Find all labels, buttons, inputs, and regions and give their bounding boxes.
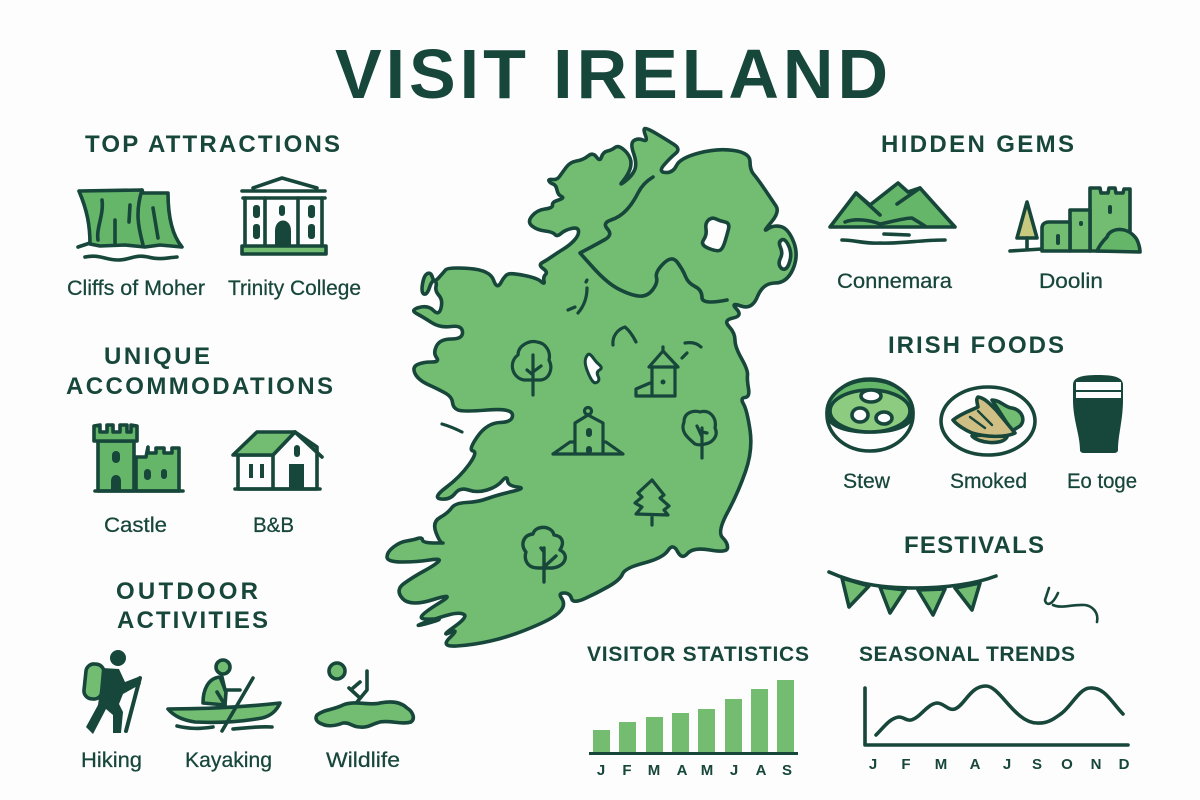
caption: Smoked [950,470,1027,493]
month labels: O [1061,756,1073,773]
panel: hidden gems [830,131,1140,293]
month labels: F [622,762,632,779]
title: VISIT IRELAND [335,35,888,113]
caption: Trinity College [228,277,361,300]
panel: seasonal trends [859,643,1130,773]
caption: Wildlife [326,749,400,772]
month labels: A [970,756,981,773]
month labels: S [1032,756,1042,773]
caption: Hiking [81,749,142,772]
icon: doolin ruins [1010,188,1140,293]
icon: fir tree [635,480,669,525]
icon: stew bowl [827,379,913,493]
icon: hiking [81,650,142,772]
month labels: F [901,756,911,773]
caption: Stew [843,470,891,493]
icon: tree south-west [523,527,565,582]
northern border [580,177,727,302]
panel: outdoor activities [81,578,413,772]
icon: cliffs of moher [67,190,205,300]
panel: visitor statistics [587,643,809,779]
icon: tree north-west [512,342,551,395]
line chart [865,686,1130,773]
caption: Castle [104,514,167,537]
heading line 2: ACTIVITIES [117,607,268,634]
icon: bunting [829,572,996,615]
heading: OUTDOOR [116,578,258,605]
panel: unique accommodations [66,343,333,537]
lake: Lough Neagh [703,218,729,251]
month labels: M [935,756,947,773]
heading: TOP ATTRACTIONS [85,131,340,158]
icon: pint glass [1067,375,1137,493]
month labels [869,756,1130,773]
island outline [387,128,796,646]
icon: B&B house [233,432,322,537]
caption: Doolin [1039,270,1103,293]
icon: church [553,408,623,454]
icon: castle [94,425,183,537]
panel: irish foods [827,332,1137,493]
icon: tower [636,347,678,396]
heading: FESTIVALS [904,532,1044,559]
month labels: N [1091,756,1101,773]
icon: squiggle [1045,588,1097,622]
month labels: A [756,762,767,779]
heading: HIDDEN GEMS [881,131,1074,158]
month labels: J [597,762,605,779]
month labels: J [869,756,877,773]
icon: wildlife [316,663,413,772]
month labels: A [677,762,688,779]
icon: trinity college [228,178,361,300]
inland lake [585,354,601,383]
lake: Strangford [779,240,791,269]
month labels: D [1119,756,1130,773]
month labels: S [782,762,792,779]
month labels: J [1003,756,1011,773]
heading: IRISH FOODS [888,332,1064,359]
icon: tree east [683,411,716,458]
caption: Eo toge [1067,470,1137,493]
icon: kayaking [168,660,280,772]
bar chart [589,680,798,779]
month labels: M [701,762,713,779]
month labels [597,762,792,779]
heading: VISITOR STATISTICS [587,643,809,666]
map of Ireland [387,128,796,646]
caption: Connemara [837,270,952,293]
icon: smoked fish plate [941,387,1035,493]
heading line 2: ACCOMMODATIONS [66,373,333,400]
river marks [442,280,701,432]
caption: Cliffs of Moher [67,277,205,300]
panel: festivals [829,532,1097,622]
caption: Kayaking [185,749,272,772]
panel: top attractions [67,131,361,300]
caption: B&B [253,514,294,537]
month labels: M [648,762,660,779]
heading: UNIQUE [104,343,210,370]
heading: SEASONAL TRENDS [859,643,1075,666]
month labels: J [730,762,738,779]
icon: connemara mountains [830,183,955,293]
